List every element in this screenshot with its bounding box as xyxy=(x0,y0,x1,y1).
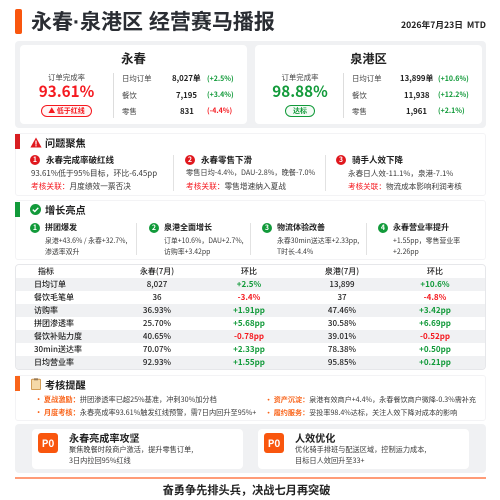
number 1: 1 xyxy=(33,155,37,165)
badge: below red line: ▲ 低于红线 xyxy=(48,106,85,116)
number 2: 2 xyxy=(152,223,156,233)
row: daily open rate xyxy=(16,356,485,370)
row: catering subsidy: -0.78pp xyxy=(234,330,264,342)
panel: 泉港区 xyxy=(255,45,482,124)
metric: catering: 餐饮 xyxy=(122,90,137,100)
row: 30min delivery: +0.50pp xyxy=(419,344,451,354)
row: visit conversion: 访购率 xyxy=(34,304,58,316)
highlight 2 title: 泉港全面增长 xyxy=(164,222,212,233)
divider xyxy=(173,155,174,191)
change: +10.6%: (+10.6%) xyxy=(438,74,469,84)
panel: KPI background xyxy=(15,41,486,128)
row: catering margin: 37 xyxy=(337,292,347,302)
icon: check circle xyxy=(30,204,41,215)
value: 13,899单: 13,899单 xyxy=(400,73,433,84)
number 2: 2 xyxy=(188,155,192,165)
highlight 3 xyxy=(262,222,359,256)
card: P0 completion rate xyxy=(32,429,243,469)
footer rule xyxy=(15,477,486,479)
number 1 xyxy=(30,223,40,233)
action text xyxy=(295,444,426,466)
change: -4.4%: (-4.4%) xyxy=(207,106,232,116)
reminder: asset deposit: • 资产沉淀：泉港有效商户+4.4%，永春餐饮商户微降-0.3%需补充 xyxy=(265,394,476,404)
number 4 xyxy=(378,223,388,233)
row: daily orders: 8,027 xyxy=(147,278,167,290)
row: catering margin xyxy=(16,291,485,304)
action text: 优化骑手排班与配送区域，控制运力成本, xyxy=(295,444,426,454)
action text: 3日内拉回95%红线 xyxy=(69,456,131,466)
number 1: 1 xyxy=(33,223,37,233)
issue 3 assessment: 考核关联：物流成本影响利润考核 xyxy=(348,180,462,192)
issue 2 title: 永春零售下滑 xyxy=(201,154,252,166)
date: 2026年7月23日 MTD xyxy=(401,18,486,30)
row: daily orders xyxy=(16,278,485,291)
heading: 永春: 永春 xyxy=(121,49,146,67)
divider xyxy=(113,73,114,118)
footer slogan: 奋勇争先排头兵，决战七月再突破 xyxy=(163,482,330,498)
metric: catering: 餐饮 xyxy=(352,90,367,100)
highlight 1 text xyxy=(45,235,127,256)
row: catering subsidy: -0.52pp xyxy=(420,330,450,342)
row: group buy penetration: 25.70% xyxy=(143,318,171,328)
heading: 泉港区: 泉港区 xyxy=(350,49,387,67)
highlight 3 text xyxy=(277,235,359,256)
divider xyxy=(325,155,326,191)
row: catering margin: 36 xyxy=(152,292,162,302)
highlight 3 text: 永春30min送达率+2.33pp, xyxy=(277,235,359,245)
badge: P0 xyxy=(38,433,58,453)
highlight 1 text: 泉港+43.6% / 永春+32.7%, xyxy=(45,235,127,245)
title: 永春·泉港区 经营赛马播报 xyxy=(31,6,275,36)
header row: 指标 xyxy=(38,266,54,277)
number 2 xyxy=(185,155,195,165)
label: completion rate: 订单完成率 xyxy=(48,72,85,83)
divider xyxy=(136,223,137,255)
section bar: issues xyxy=(15,134,20,149)
header row: 永春(7月) xyxy=(140,266,174,277)
label: completion rate: 订单完成率 xyxy=(282,72,318,83)
row: daily orders: 日均订单 xyxy=(34,278,66,290)
header row: 泉港(7月) xyxy=(325,266,359,277)
metric: retail: 零售 xyxy=(352,106,367,116)
row: group buy penetration xyxy=(16,317,485,330)
action text: 聚焦晚餐时段商户激活，提升零售订单, xyxy=(69,444,193,454)
change: +2.1%: (+2.1%) xyxy=(438,106,465,116)
row: daily orders: 13,899 xyxy=(329,278,355,290)
highlight 2 text: 订单+10.6%，DAU+2.7%, xyxy=(164,235,244,245)
row: visit conversion: 36.93% xyxy=(143,304,171,316)
highlight 2 xyxy=(149,222,244,256)
reminder: summer incentive: • 夏战激励：拼团渗透率已超25%基准，冲刺30%加分档 xyxy=(35,394,217,404)
row: group buy penetration: +6.69pp xyxy=(419,318,451,328)
value: 8,027单: 8,027单 xyxy=(172,73,201,84)
panel: assessment reminders xyxy=(15,375,486,421)
heading: highlights: 增长亮点 xyxy=(45,202,86,216)
highlight 1 title: 拼团爆发 xyxy=(45,222,77,233)
value: 7,195: 7,195 xyxy=(176,90,197,100)
panel: 永春 xyxy=(20,45,247,124)
row: catering subsidy: 39.01% xyxy=(328,330,356,342)
highlight 4 text xyxy=(393,235,460,256)
row: daily orders: +2.5% xyxy=(237,278,261,290)
divider xyxy=(343,73,344,118)
row: group buy penetration: +5.68pp xyxy=(233,318,265,328)
row: 30min delivery: 70.07% xyxy=(143,344,171,354)
highlight 4 xyxy=(378,222,460,256)
icon: warning triangle xyxy=(30,138,42,148)
panel: highlights xyxy=(15,200,486,260)
header accent bar xyxy=(15,9,22,34)
header row xyxy=(16,265,485,279)
heading: reminders: 考核提醒 xyxy=(45,376,86,392)
metric: daily orders: 日均订单 xyxy=(352,73,382,84)
panel: P0 actions background xyxy=(15,424,486,473)
number 4: 4 xyxy=(381,223,385,233)
change: +2.5%: (+2.5%) xyxy=(207,74,234,84)
issue 3 title: 骑手人效下降 xyxy=(352,154,403,166)
number 1 xyxy=(30,155,40,165)
row: group buy penetration: 拼团渗透率 xyxy=(34,318,74,328)
divider xyxy=(366,223,367,255)
number: 98.88%: 98.88% xyxy=(272,80,328,102)
row: visit conversion: +1.91pp xyxy=(233,304,265,316)
issue 1 xyxy=(30,154,157,192)
number 3: 3 xyxy=(265,223,269,233)
badge: on target xyxy=(285,105,315,117)
action text xyxy=(69,444,193,466)
icon: clipboard xyxy=(31,378,41,390)
row: daily open rate: 92.93% xyxy=(143,356,171,368)
divider xyxy=(250,223,251,255)
metric: daily orders: 日均订单 xyxy=(122,73,152,84)
row: daily open rate: 日均营业率 xyxy=(34,356,74,368)
header row: 环比 xyxy=(427,266,443,277)
highlight 1 text: 渗透率双升 xyxy=(45,246,79,256)
highlight 4 text: +1.55pp，零售营业率 xyxy=(393,235,460,245)
row: 30min delivery: 78.38% xyxy=(328,344,356,354)
reminder: fulfilment service: • 履约服务：妥投率98.4%达标，关注人效下降对成本的影响 xyxy=(265,408,457,418)
row: catering subsidy: 40.65% xyxy=(143,330,171,342)
row: visit conversion: +3.42pp xyxy=(419,304,451,316)
badge: P0: P0 xyxy=(42,435,54,450)
issue 2 text: 零售日均-4.4%，DAU-2.8%，晚餐-7.0% xyxy=(186,168,315,178)
badge: below red line xyxy=(41,105,92,117)
issue 1 assessment: 考核关联：月度绩效一票否决 xyxy=(31,180,131,192)
row: catering margin: -3.4% xyxy=(238,292,260,302)
action text: 目标日人效回升至33+ xyxy=(295,456,364,466)
comparison table xyxy=(15,264,486,370)
row: catering margin: 餐饮毛笔单 xyxy=(34,292,74,302)
issue 1 title: 永春完成率破红线 xyxy=(46,154,114,166)
row: daily open rate: +1.55pp xyxy=(233,356,265,368)
highlight 3 text: T时长-4.4% xyxy=(277,246,313,256)
number 3: 3 xyxy=(339,155,343,165)
highlight 4 title: 永春营业率提升 xyxy=(393,222,449,233)
row: daily open rate: 95.85% xyxy=(328,356,356,368)
row: 30min delivery: +2.33pp xyxy=(233,344,265,354)
number 2 xyxy=(149,223,159,233)
row: catering subsidy xyxy=(16,330,485,343)
action title: 人效优化 xyxy=(295,430,335,445)
issue 3 text: 永春日人效-11.1%，泉港-7.1% xyxy=(348,168,453,179)
issue 2 assessment: 考核关联：零售增速纳入夏战 xyxy=(186,180,286,192)
reminder: monthly assessment: • 月度考核：永春亮成率93.61%触发红线预警，需7日内回升至95%+ xyxy=(35,408,256,418)
change: +12.2%: (+12.2%) xyxy=(438,90,469,100)
row: catering subsidy: 餐饮补贴力度 xyxy=(34,330,82,342)
change: +3.4%: (+3.4%) xyxy=(207,90,234,100)
issue 1 text: 93.61%低于95%目标，环比-6.45pp xyxy=(31,168,157,179)
value: 11,938: 11,938 xyxy=(404,90,430,100)
issue 2 xyxy=(185,154,315,192)
heading: issues: 问题聚焦 xyxy=(45,134,86,150)
row: catering margin: -4.8% xyxy=(424,292,446,302)
card: P0 efficiency xyxy=(258,429,469,469)
badge: P0: P0 xyxy=(268,435,280,450)
issue 3 xyxy=(336,154,462,192)
badge: P0 xyxy=(264,433,284,453)
badge: on target: 达标 xyxy=(293,106,307,116)
highlight 1 xyxy=(30,222,127,256)
section bar: reminders xyxy=(15,376,20,391)
row: group buy penetration: 30.58% xyxy=(328,318,356,328)
row: 30min delivery xyxy=(16,343,485,356)
number: 93.61%: 93.61% xyxy=(39,80,94,102)
highlight 3 title: 物流体验改善 xyxy=(277,222,325,233)
number 3 xyxy=(262,223,272,233)
row: visit conversion: 47.46% xyxy=(328,304,356,316)
row: 30min delivery: 30min送达率 xyxy=(34,344,82,354)
value: 1,961: 1,961 xyxy=(406,106,427,116)
metric: retail: 零售 xyxy=(122,106,137,116)
header row: 环比 xyxy=(241,266,257,277)
action title: 永春亮成率攻坚 xyxy=(69,430,140,445)
value: 831: 831 xyxy=(180,106,194,116)
highlight 4 text: +2.26pp xyxy=(393,246,419,256)
panel: issues xyxy=(15,133,486,196)
row: daily orders: +10.6% xyxy=(420,278,450,290)
highlight 2 text: 访购率+3.42pp xyxy=(164,246,210,256)
section bar: highlights xyxy=(15,202,20,217)
number 3 xyxy=(336,155,346,165)
highlight 2 text xyxy=(164,235,244,256)
row: visit conversion xyxy=(16,304,485,317)
row: daily open rate: +0.21pp xyxy=(419,356,451,368)
